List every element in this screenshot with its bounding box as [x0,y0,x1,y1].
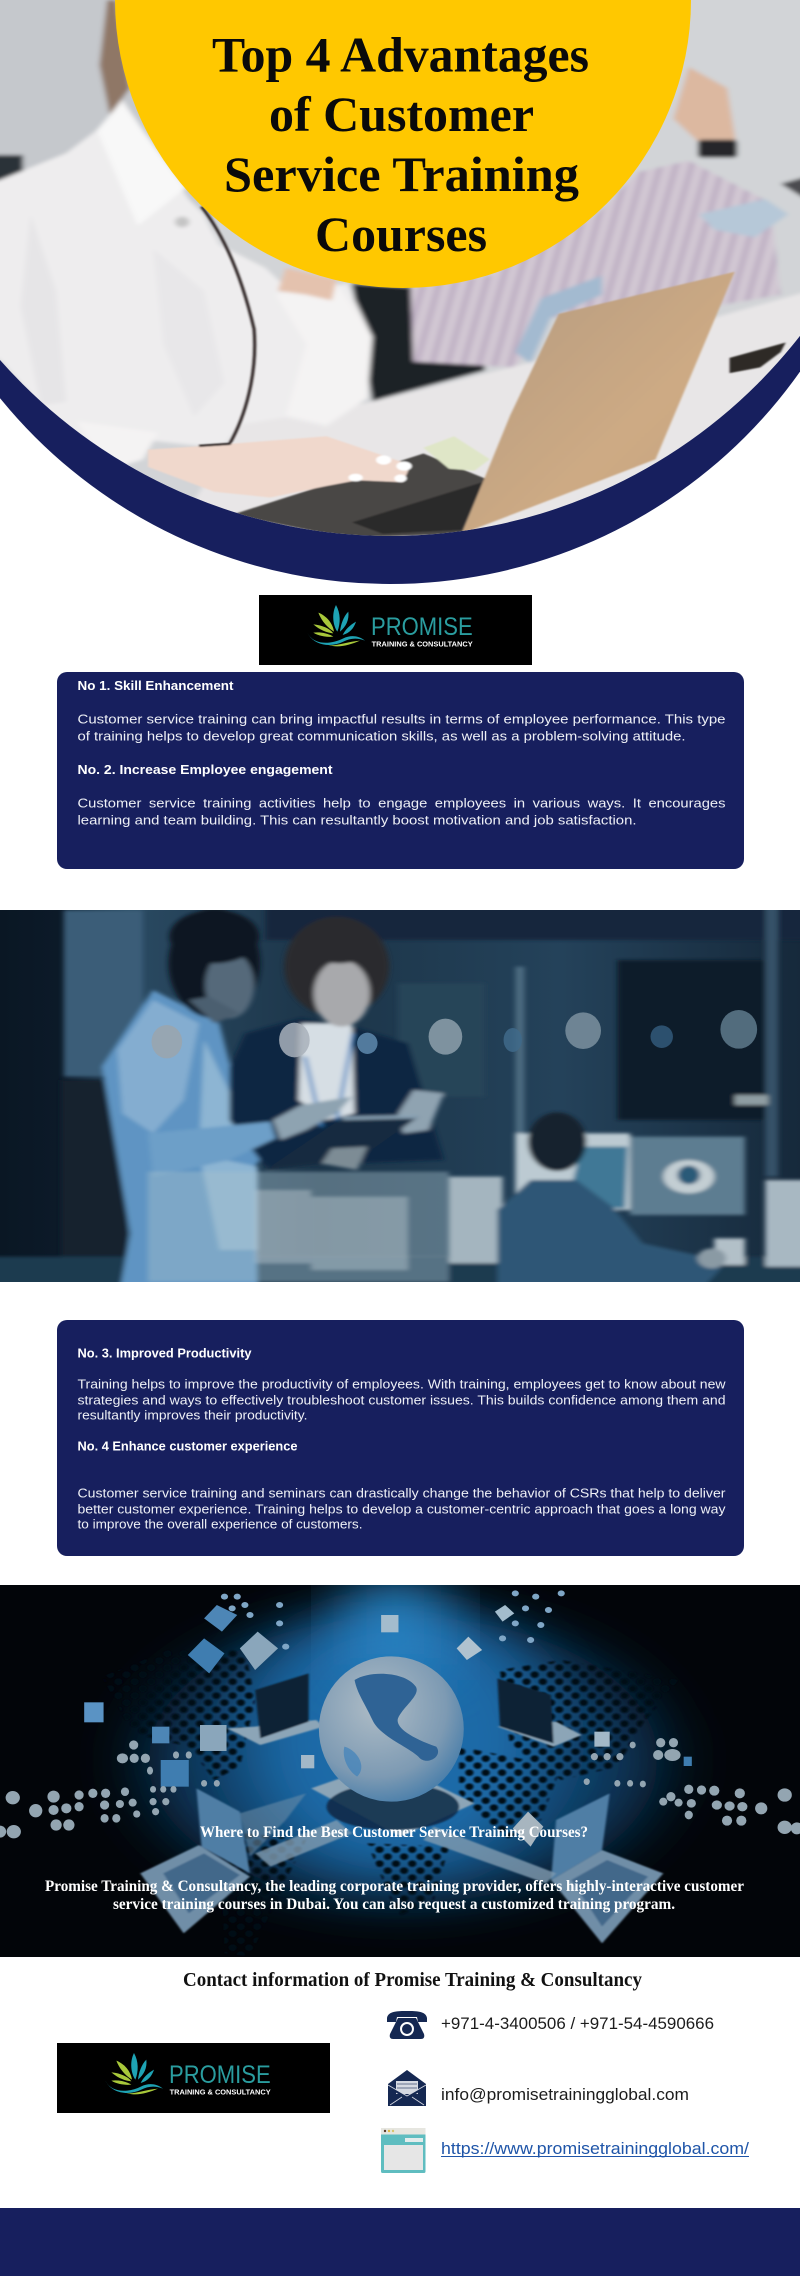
logo: Promise Training & Consultancy (contact): PROMISE [169,2061,271,2089]
hero photo: woman at laptop [0,0,800,536]
title: Service Training [224,146,579,202]
text block: where to find body: service training courses in Dubai. You can also request a customized training program. [113,1896,675,1913]
text block: No 4 body: better customer experience. Training helps to develop a customer-centric approach that goes a long way [78,1502,726,1516]
text block: No 1 body: Customer service training can bring impactful results in terms of employee performance. This type [78,712,726,726]
logo: Promise Training & Consultancy (top): PROMISE [371,613,473,641]
text block: where to find body [45,1878,744,1913]
bright dot band [0,1738,800,1838]
beam dots top [221,1590,565,1650]
text block: No 3 body: strategies and ways to effectively troubleshoot customer issues. This builds confidence among them and [78,1392,726,1408]
text: phone numbers: +971-4-3400506 / +971-54-4590666 [441,2014,714,2033]
desk [196,293,800,536]
title: of Customer [269,86,534,142]
footer band [0,2208,800,2276]
text block: No 4 body: Customer service training and seminars can drastically change the behavior of CSRs that help to deliver [78,1486,726,1500]
heading: No 2: No. 2. Increase Employee engagement [78,762,333,777]
laptop [232,453,485,538]
photo: team with tablet in dark office [0,900,800,1290]
icon: browser window [381,2128,426,2173]
yellow title circle [115,0,691,288]
logo: Promise Training & Consultancy (top) [259,595,532,665]
text block: No 2 body: Customer service training activities help to engage employees in various ways. It encourages [78,796,726,810]
text block: No 4 body: to improve the overall experience of customers. [78,1516,362,1532]
heading: No 1: No 1. Skill Enhancement [78,678,234,693]
bokeh lights [152,1025,182,1058]
man's striped shirt [411,161,781,367]
icon: telephone [387,2011,427,2039]
logo: Promise Training & Consultancy (contact): TRAINING & CONSULTANCY [170,2088,271,2097]
heading: No 3: No. 3. Improved Productivity [78,1346,252,1360]
globe [319,1656,464,1802]
woman head [284,917,389,1017]
man shirt [102,990,276,1290]
title [212,26,589,262]
panel: advantages 3 and 4 [57,1320,744,1556]
icon: open envelope [388,2070,426,2106]
man head [168,908,260,1018]
woman jacket [230,1018,444,1167]
logo: Promise Training & Consultancy (top): TRAINING & CONSULTANCY [372,640,473,649]
heading: contact information: Contact information of Promise Training & Consultancy [183,1969,642,1991]
title: Courses [315,206,487,262]
text block: No 1 body [78,712,726,744]
hero: navy crescent [0,0,800,584]
seated man [497,1180,724,1287]
chair [352,283,485,401]
text block: where to find body: Promise Training & Consultancy, the leading corporate training provider, offers highly-interactive customer [45,1878,744,1895]
text block: No 4 body [78,1486,726,1532]
text: website link: https://www.promisetrainingglobal.com/ [441,2139,749,2158]
arms and tablet [148,1122,276,1177]
text block: No 2 body: learning and team building. This can resultantly boost motivation and job satisfaction. [78,812,636,828]
panel: advantages 1 and 2 [57,672,744,869]
text block: No 3 body [78,1376,726,1422]
transparent screen [148,1172,449,1282]
woman's shirt [0,100,372,471]
text block: No 1 body: of training helps to develop great communication skills, as well as a problem-solving attitude. [78,728,686,744]
logo: Promise Training & Consultancy (contact) [57,2043,330,2113]
heading: where to find: Where to Find the Best Customer Service Training Courses? [200,1824,588,1841]
photo: globe and network of laptops [0,1580,800,1957]
honeycomb continents [102,1650,679,1957]
heading: No 4: No. 4 Enhance customer experience [78,1438,298,1454]
text block: No 3 body: Training helps to improve the productivity of employees. With training, employees get to know about new [78,1376,726,1392]
text block: No 2 body [78,796,726,828]
text: email: info@promisetrainingglobal.com [441,2085,689,2104]
title: Top 4 Advantages [212,26,589,82]
floating squares [84,1605,692,1847]
text block: No 3 body: resultantly improves their productivity. [78,1408,308,1422]
bottom light platforms and laptops [140,1673,663,1943]
